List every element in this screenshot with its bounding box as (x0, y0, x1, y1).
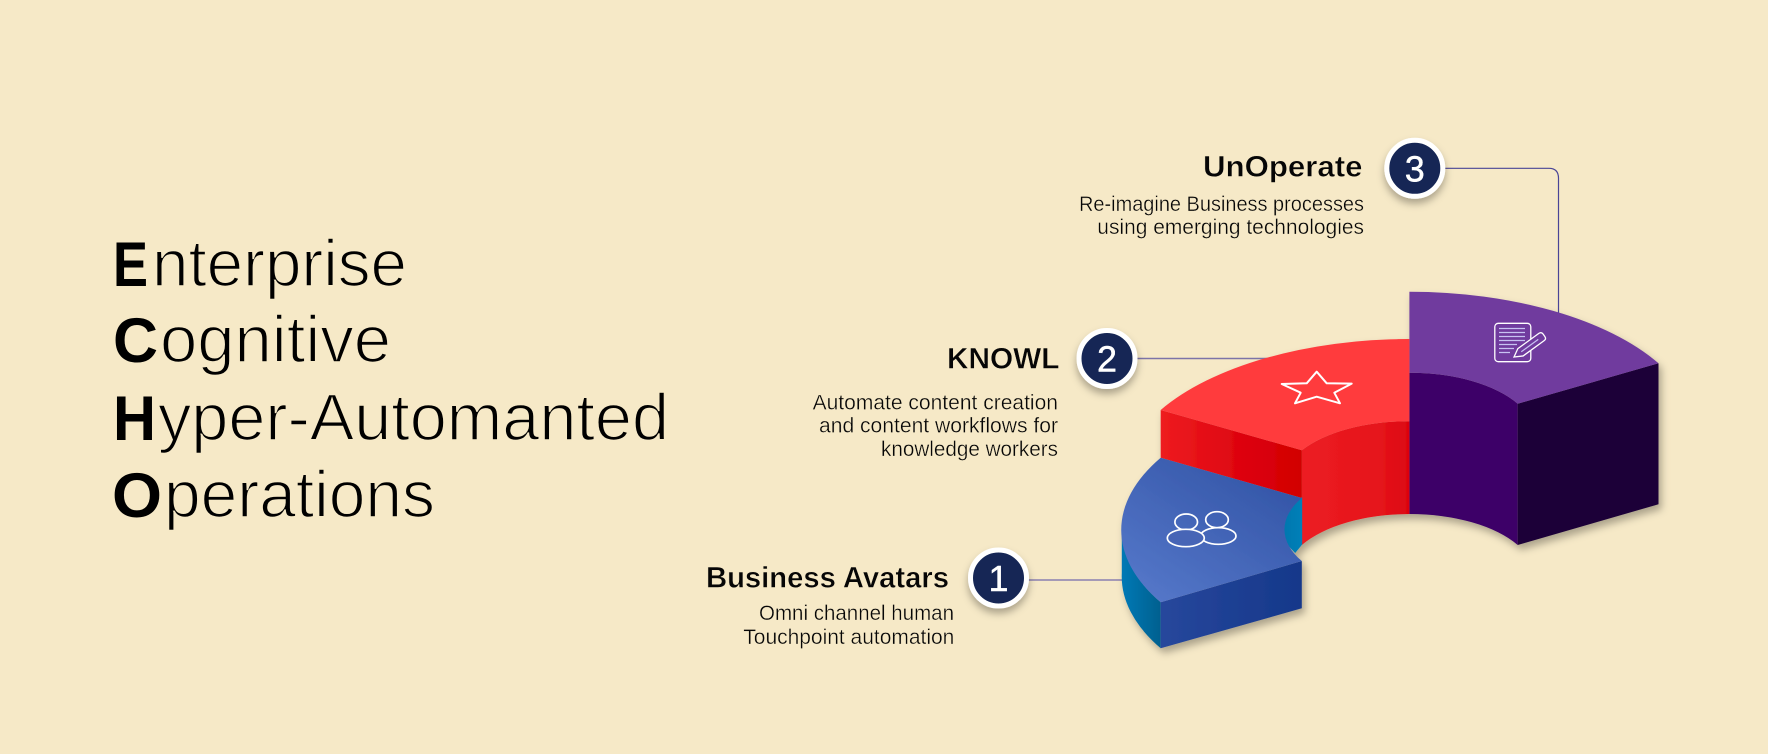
icon: two users (1167, 512, 1236, 547)
badge 3: 3 (1405, 148, 1425, 189)
title line: Enterprise: E (113, 230, 148, 300)
badge 2: 2 (1097, 338, 1117, 380)
description: Business Avatars: Omni channel human (759, 601, 954, 625)
label: Business Avatars (706, 561, 954, 649)
label: UnOperate: UnOperate (1203, 151, 1362, 184)
icon: document and pencil (1495, 323, 1547, 362)
description: KNOWL (813, 390, 1058, 461)
description: KNOWL: knowledge workers (881, 437, 1058, 461)
title: ECHO acronym (112, 226, 669, 531)
description: KNOWL: Automate content creation (813, 390, 1058, 414)
icon: star (1282, 372, 1352, 403)
badge 3 (1387, 140, 1443, 196)
title line: Hyper-Automanted: yper-Automanted (158, 380, 669, 454)
title line: Cognitive: C (113, 306, 158, 376)
title line: Operations: O (112, 461, 162, 531)
description: UnOperate: using emerging technologies (1097, 215, 1364, 239)
label: KNOWL (813, 343, 1060, 461)
title line: Operations: perations (164, 457, 435, 531)
title line: Hyper-Automanted: H (113, 384, 156, 454)
label: Business Avatars: Business Avatars (706, 561, 949, 594)
badge 1 (970, 550, 1026, 606)
description: Business Avatars: Touchpoint automation (743, 625, 954, 649)
segment 3: purple (1409, 292, 1658, 545)
segment 2: red (1161, 339, 1409, 545)
description: UnOperate: Re-imagine Business processes (1079, 192, 1364, 216)
description: Business Avatars (743, 601, 954, 649)
title line: Enterprise: nterprise (152, 226, 407, 300)
title line: Cognitive: ognitive (160, 302, 391, 376)
description: UnOperate (1079, 192, 1364, 239)
connector line 1 (1025, 579, 1130, 581)
badge 1: 1 (988, 558, 1009, 599)
segment 1: blue (1121, 458, 1302, 648)
label: UnOperate (1079, 151, 1364, 239)
label: KNOWL: KNOWL (947, 343, 1060, 376)
connector line 3 (1440, 168, 1558, 320)
description: KNOWL: and content workflows for (819, 414, 1058, 438)
connector line 2 (1130, 358, 1275, 360)
badge 2 (1079, 330, 1135, 386)
3D segmented ring chart (1121, 292, 1658, 648)
